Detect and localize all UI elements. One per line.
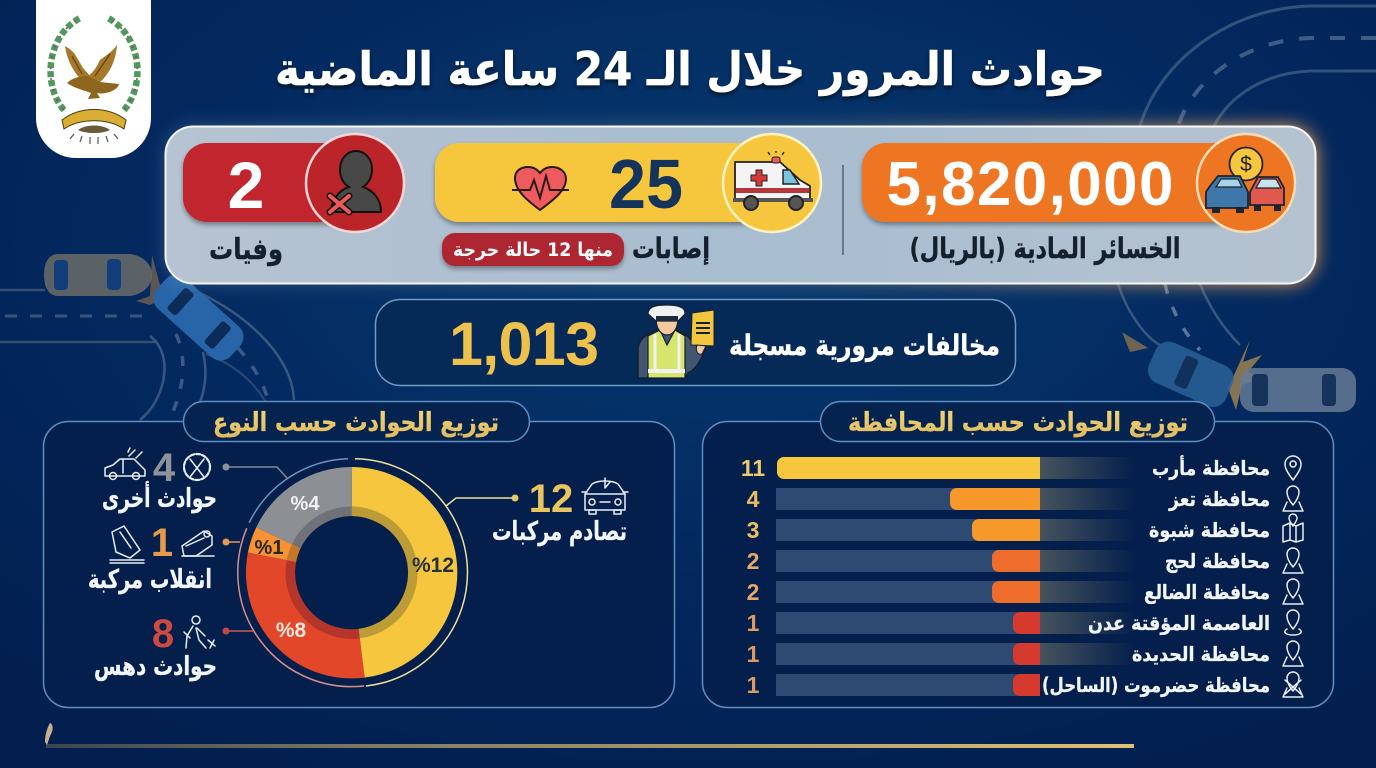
deaths stat: [183, 134, 404, 266]
legend: run-over accidents: حوادث دهس: [94, 652, 217, 682]
bar row: Aden: العاصمة المؤقتة عدن: [1088, 611, 1270, 635]
bar row: Taiz: محافظة تعز: [1168, 487, 1270, 511]
bar row: Hodeidah: محافظة الحديدة: [1132, 642, 1270, 666]
critical cases badge: منها 12 حالة حرجة: [453, 239, 613, 261]
icon: cars and money: [1197, 134, 1295, 232]
outer thin ring: [238, 459, 467, 687]
icon: heart pulse: [512, 167, 569, 210]
deaths number: 2: [228, 148, 264, 222]
eagle: [65, 45, 119, 99]
legend: overturned vehicle: 1: [151, 521, 173, 565]
losses number: 5,820,000: [886, 150, 1174, 219]
donut chart: %1: [255, 537, 283, 559]
icon: person with x: [306, 134, 404, 232]
violations panel: [376, 300, 1016, 386]
bar row: Marib: محافظة مأرب: [1152, 454, 1270, 480]
bar row: Dhale: 2: [747, 579, 759, 605]
bar row: Marib: [741, 454, 1301, 481]
slice: run over: [246, 552, 365, 678]
heading: by governorate: [820, 402, 1214, 442]
bar row: Aden: 1: [747, 610, 760, 636]
banner: [62, 110, 126, 129]
bar row: Taiz: [747, 486, 1303, 512]
background: crash road scene right: [1118, 6, 1376, 412]
legend: run-over accidents: 8: [152, 612, 174, 656]
bar row: Dhale: [747, 579, 1303, 605]
icon: falling car: [110, 526, 144, 563]
bar row: Aden: [747, 610, 1301, 636]
legend: overturned vehicle: انقلاب مركبة: [88, 565, 212, 595]
legend: other accidents: 4: [153, 446, 176, 490]
critical cases badge: [442, 233, 624, 266]
inner ring shades: [290, 511, 413, 634]
bar row: Shabwa: 3: [747, 517, 759, 543]
heading: by governorate: توزيع الحوادث حسب المحافظة: [848, 408, 1188, 438]
bar row: Marib: 11: [741, 455, 765, 481]
donut chart: %8: [276, 619, 306, 642]
slice: other: [256, 467, 352, 548]
footer gold line: [45, 723, 1134, 748]
injuries label: إصابات: [632, 232, 710, 266]
violations label: مخالفات مرورية مسجلة: [729, 329, 1000, 362]
bar row: Hadramawt coast: 1: [747, 672, 760, 698]
panel: distribution by type: [44, 402, 674, 708]
bar row: Shabwa: محافظة شبوة: [1149, 518, 1270, 542]
heading: by type: توزيع الحوادث حسب النوع: [213, 408, 499, 438]
icon: pedestrian: [184, 616, 215, 648]
bar row: Lahij: 2: [747, 548, 759, 574]
icon: cars and money: $: [1240, 153, 1252, 176]
background: crash road scene left: [0, 254, 294, 420]
material losses stat: [862, 134, 1295, 265]
bar row: Lahij: محافظة لحج: [1165, 549, 1270, 573]
legend: collisions: تصادم مركبات: [492, 517, 627, 547]
panel: distribution by governorate: [702, 402, 1334, 708]
bar row: Hodeidah: [747, 641, 1303, 667]
bar row: Taiz: 4: [747, 486, 760, 512]
injuries number: 25: [609, 145, 683, 223]
bar row: Shabwa: [747, 514, 1303, 543]
icon: ambulance: [723, 134, 821, 232]
bar row: Hadramawt coast: محافظة حضرموت (الساحل): [1042, 673, 1270, 697]
slice: overturn: [248, 527, 300, 562]
bar row: Hodeidah: 1: [747, 641, 760, 667]
eye: [78, 126, 110, 133]
donut chart: [238, 459, 467, 687]
slice: collisions: [352, 467, 457, 678]
injuries stat: [435, 134, 821, 266]
icon: gear with tools: [184, 454, 210, 480]
violations number: 1,013: [449, 310, 599, 378]
legend: overturned vehicle: [88, 521, 240, 595]
logo badge: [36, 0, 151, 158]
losses label: الخسائر المادية (بالريال): [910, 232, 1180, 265]
title: حوادث المرور خلال الـ 24 ساعة الماضية: [275, 42, 1105, 96]
deaths label: وفيات: [209, 232, 283, 266]
icon: traffic officer: [638, 305, 714, 378]
wreath: [51, 18, 137, 110]
legend: other accidents: حوادث أخرى: [102, 481, 217, 514]
bar row: Hadramawt coast: [747, 672, 1303, 698]
bar row: Lahij: [747, 548, 1303, 574]
legend: run-over accidents: [94, 612, 253, 682]
icon: crashed car front: [582, 478, 628, 514]
heading: by type: [184, 402, 530, 442]
icon: upside-down car: [182, 531, 214, 556]
donut chart: %4: [291, 493, 320, 515]
icon: car with impact: [105, 448, 145, 480]
slice labels: %12: [412, 554, 454, 577]
legend: other accidents: [102, 446, 287, 514]
bar row: Dhale: محافظة الضالع: [1144, 580, 1270, 604]
summary panel: [165, 126, 1316, 284]
legend: collisions: [446, 477, 628, 547]
legend: collisions: 12: [529, 477, 573, 521]
